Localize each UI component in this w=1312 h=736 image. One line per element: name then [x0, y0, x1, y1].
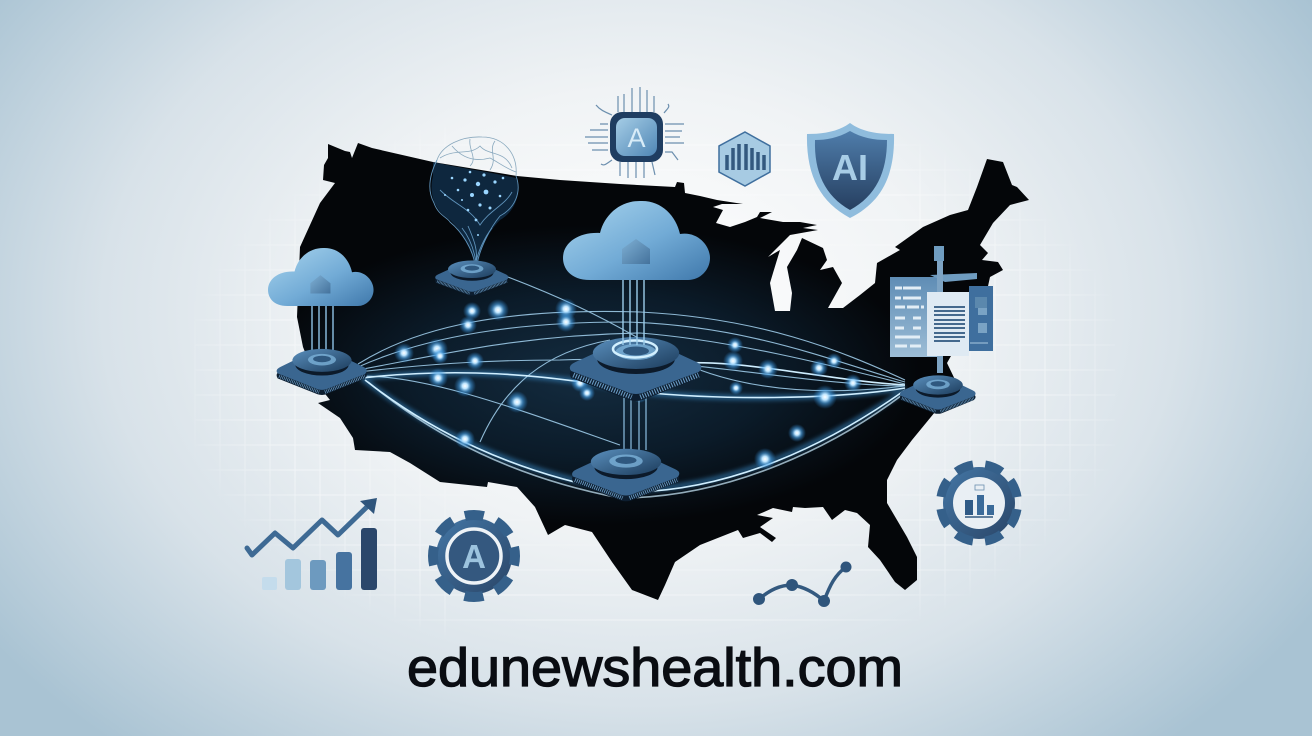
center chip — [570, 337, 701, 401]
icon: AI chip — [585, 87, 684, 178]
icon: AI shield: AI — [832, 147, 868, 188]
center cloud — [563, 201, 710, 280]
bottom chip pillar — [624, 395, 646, 450]
thin fibers — [358, 277, 905, 445]
icon: AI chip: A — [627, 123, 646, 153]
bright fibers — [362, 363, 906, 498]
icon: line chart — [753, 562, 852, 607]
icon: A gear — [433, 515, 515, 597]
icon: trend chart — [247, 498, 377, 590]
brain chip base — [435, 260, 508, 296]
icon: AI shield — [807, 123, 894, 218]
right chip — [900, 375, 976, 414]
icon: A gear: A — [462, 538, 486, 575]
glow under fibers — [362, 373, 905, 490]
center chip light ring — [613, 340, 657, 358]
left cloud pillar — [312, 305, 333, 350]
bottom chip — [572, 449, 679, 501]
site name: edunewshealth.com — [407, 638, 903, 698]
brain hologram — [430, 137, 518, 264]
map of the United States — [297, 143, 1029, 600]
icon: analytics gear — [929, 453, 1029, 553]
document server icon — [890, 246, 993, 373]
icon: hexagon bar chart — [719, 132, 770, 186]
network fibers — [358, 277, 906, 498]
glowing network nodes — [394, 298, 862, 470]
left chip — [277, 349, 367, 395]
background grid — [219, 210, 1098, 620]
center cloud pillar — [623, 278, 644, 345]
left cloud — [268, 248, 374, 306]
